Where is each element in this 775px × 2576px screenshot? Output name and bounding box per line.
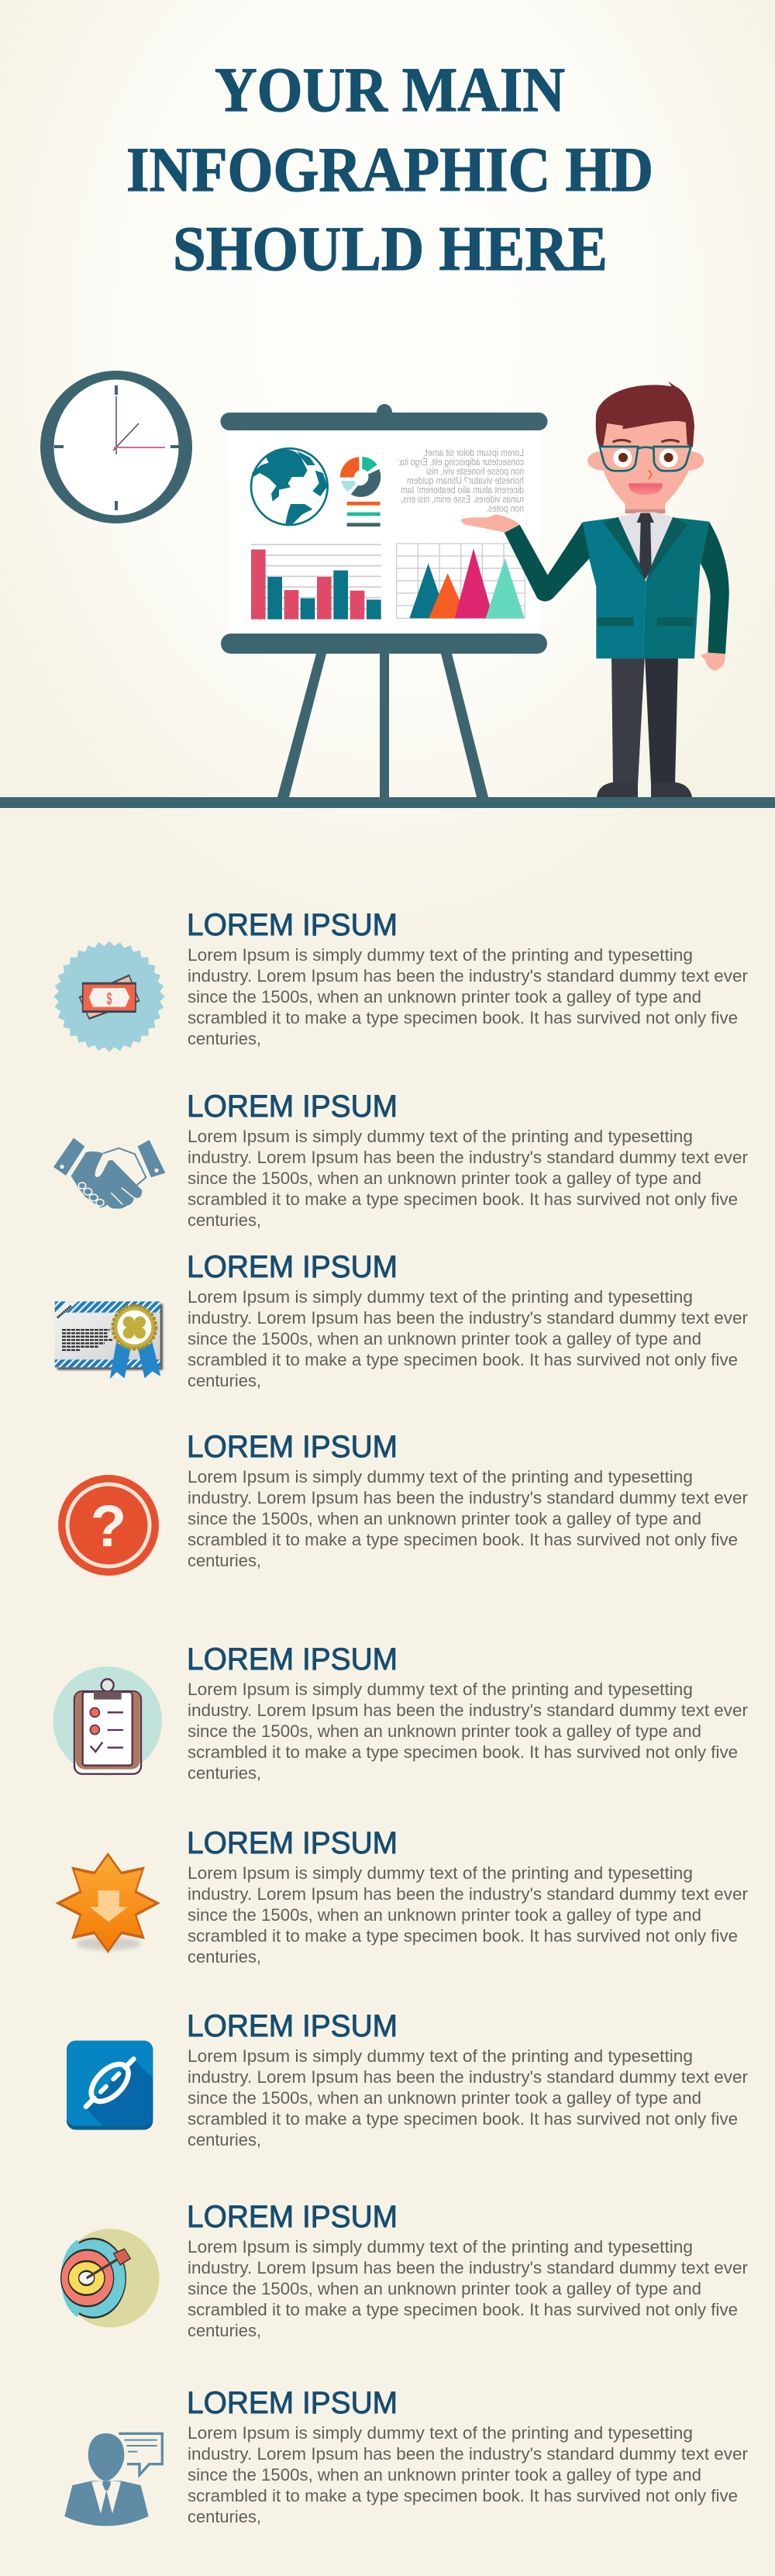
list item 1 [53, 908, 749, 1052]
item text: since the 1500s, when an unknown printer took a galley of type and [188, 987, 701, 1007]
neck [625, 500, 665, 513]
board top bar [220, 404, 547, 430]
item text: since the 1500s, when an unknown printer took a galley of type and [188, 1169, 701, 1188]
item text [188, 945, 749, 1048]
item text: Lorem Ipsum is simply dummy text of the printing and typesetting [188, 2423, 693, 2443]
item text: centuries, [188, 2507, 261, 2526]
item text [188, 2423, 749, 2526]
item text: industry. Lorem Ipsum has been the industry's standard dummy text ever [188, 966, 749, 986]
item text: Lorem Ipsum is simply dummy text of the printing and typesetting [188, 945, 693, 965]
item text: scrambled it to make a type specimen book. It has survived not only five [188, 1742, 738, 1762]
item text [188, 1680, 749, 1783]
trousers [611, 655, 645, 785]
item text: scrambled it to make a type specimen book. It has survived not only five [188, 2109, 738, 2129]
left arm [505, 522, 590, 601]
hero background [0, 0, 775, 938]
board sheet [229, 426, 540, 637]
board legs [277, 654, 488, 797]
item text: centuries, [188, 1763, 261, 1783]
item text: scrambled it to make a type specimen book. It has survived not only five [188, 1350, 738, 1369]
bar chart [251, 544, 381, 620]
item text: Lorem Ipsum is simply dummy text of the printing and typesetting [188, 2237, 693, 2257]
lower hand [701, 653, 725, 671]
item text: industry. Lorem Ipsum has been the industry's standard dummy text ever [188, 1701, 749, 1720]
item text: centuries, [188, 2321, 261, 2340]
item text [188, 1287, 749, 1390]
icon: orange star [58, 1854, 157, 1952]
list item 9 [64, 2386, 749, 2526]
item text: centuries, [188, 1551, 261, 1570]
mirrored board text: consectetur adipiscing elit. Ergo ita: [398, 457, 524, 468]
item text: centuries, [188, 1371, 261, 1390]
floor bar [0, 797, 775, 808]
list item 6 [58, 1826, 749, 1967]
eyebrows [613, 440, 680, 442]
mirrored board text [398, 447, 524, 514]
item text [188, 1127, 749, 1230]
item text: Lorem Ipsum is simply dummy text of the printing and typesetting [188, 1127, 693, 1146]
item text [188, 2237, 749, 2340]
presenting hand [461, 514, 520, 533]
icon: handshake [53, 1138, 165, 1209]
globe [251, 448, 328, 525]
item text: scrambled it to make a type specimen book. It has survived not only five [188, 2486, 738, 2505]
item heading: LOREM IPSUM [187, 908, 398, 942]
icon: chain link [67, 2041, 153, 2130]
glasses [600, 447, 691, 471]
item text: Lorem Ipsum is simply dummy text of the printing and typesetting [188, 1863, 693, 1883]
mirrored board text: Lorem ipsum dolor sit amet, [423, 447, 524, 458]
list item 3 [55, 1250, 749, 1390]
icon: money badge [53, 941, 165, 1052]
item text: industry. Lorem Ipsum has been the industry's standard dummy text ever [188, 1488, 749, 1507]
item text: since the 1500s, when an unknown printer took a galley of type and [188, 1509, 701, 1528]
item text: industry. Lorem Ipsum has been the industry's standard dummy text ever [188, 2067, 749, 2087]
item text [188, 2046, 749, 2150]
title: SHOULD HERE [173, 213, 608, 284]
ears [587, 451, 704, 471]
item heading: LOREM IPSUM [187, 1430, 398, 1464]
item text [188, 1863, 749, 1967]
item text: since the 1500s, when an unknown printer took a galley of type and [188, 1329, 701, 1348]
item heading: LOREM IPSUM [187, 2386, 398, 2420]
hair [596, 382, 694, 447]
mirrored board text: non potes. [486, 503, 524, 514]
tie [637, 513, 654, 579]
item text: Lorem Ipsum is simply dummy text of the printing and typesetting [188, 1287, 693, 1307]
item text: Lorem Ipsum is simply dummy text of the printing and typesetting [188, 1467, 693, 1487]
jacket [583, 517, 646, 658]
item text: since the 1500s, when an unknown printer took a galley of type and [188, 1905, 701, 1925]
item text: centuries, [188, 1029, 261, 1048]
item text: centuries, [188, 2130, 261, 2150]
icon: target with arrow [61, 2229, 160, 2327]
icon: question mark: ? [91, 1493, 126, 1559]
icon: clipboard [53, 1666, 162, 1776]
presentation board [220, 404, 547, 797]
item text: industry. Lorem Ipsum has been the industry's standard dummy text ever [188, 2258, 749, 2277]
face [602, 419, 691, 506]
item heading: LOREM IPSUM [187, 2200, 398, 2234]
item text: since the 1500s, when an unknown printer took a galley of type and [188, 2279, 701, 2298]
presenter character [461, 382, 729, 797]
title: YOUR MAIN [215, 54, 565, 125]
mirrored board text: dicerent alium alio beatiorem! Iam [401, 485, 524, 496]
icon: wall clock [40, 371, 192, 523]
item heading: LOREM IPSUM [187, 2009, 398, 2043]
list item 7 [67, 2009, 749, 2150]
item text: scrambled it to make a type specimen book. It has survived not only five [188, 1530, 738, 1549]
item text: since the 1500s, when an unknown printer took a galley of type and [188, 2088, 701, 2108]
item text: scrambled it to make a type specimen book. It has survived not only five [188, 1008, 738, 1027]
lapels [603, 517, 687, 582]
item heading: LOREM IPSUM [187, 1089, 398, 1124]
icon: money badge: $ [107, 989, 112, 1008]
pockets [598, 617, 633, 626]
item heading: LOREM IPSUM [187, 1642, 398, 1676]
icon: certificate [55, 1301, 163, 1379]
item text [188, 1467, 749, 1570]
item heading: LOREM IPSUM [187, 1826, 398, 1860]
list item 8 [61, 2200, 749, 2340]
item text: industry. Lorem Ipsum has been the industry's standard dummy text ever [188, 1148, 749, 1167]
triangle chart [397, 544, 525, 618]
icon: businessman with speech bubble [64, 2433, 162, 2526]
nose [649, 471, 651, 479]
mirrored board text: non posse honeste vivi, nisi [426, 466, 524, 477]
donut chart [340, 457, 381, 527]
item text: scrambled it to make a type specimen book. It has survived not only five [188, 2300, 738, 2319]
eyes [613, 449, 632, 468]
shoes [597, 782, 692, 797]
item text: since the 1500s, when an unknown printer took a galley of type and [188, 2465, 701, 2484]
item text: since the 1500s, when an unknown printer took a galley of type and [188, 1721, 701, 1741]
mirrored board text: ruinas videres. Esse enim, nisi eris, [401, 494, 524, 505]
item text: centuries, [188, 1947, 261, 1967]
list item 4 [58, 1430, 749, 1576]
title [126, 54, 653, 284]
mouth [629, 483, 663, 495]
item text: industry. Lorem Ipsum has been the industry's standard dummy text ever [188, 1884, 749, 1904]
item text: industry. Lorem Ipsum has been the industry's standard dummy text ever [188, 1308, 749, 1328]
item text: scrambled it to make a type specimen book. It has survived not only five [188, 1190, 738, 1209]
title: INFOGRAPHIC HD [126, 134, 653, 205]
right arm [701, 522, 729, 654]
icon: question mark [58, 1475, 159, 1576]
mirrored board text: honeste vivatur? Utinam quidem [407, 475, 524, 486]
shirt [618, 513, 673, 579]
list item 5 [53, 1642, 749, 1783]
item text: industry. Lorem Ipsum has been the industry's standard dummy text ever [188, 2444, 749, 2464]
board bottom bar [221, 634, 547, 654]
item text: Lorem Ipsum is simply dummy text of the printing and typesetting [188, 1680, 693, 1699]
item heading: LOREM IPSUM [187, 1250, 398, 1284]
list item 2 [53, 1089, 749, 1230]
item text: centuries, [188, 1210, 261, 1230]
item text: Lorem Ipsum is simply dummy text of the printing and typesetting [188, 2046, 693, 2066]
item text: scrambled it to make a type specimen book. It has survived not only five [188, 1926, 738, 1946]
